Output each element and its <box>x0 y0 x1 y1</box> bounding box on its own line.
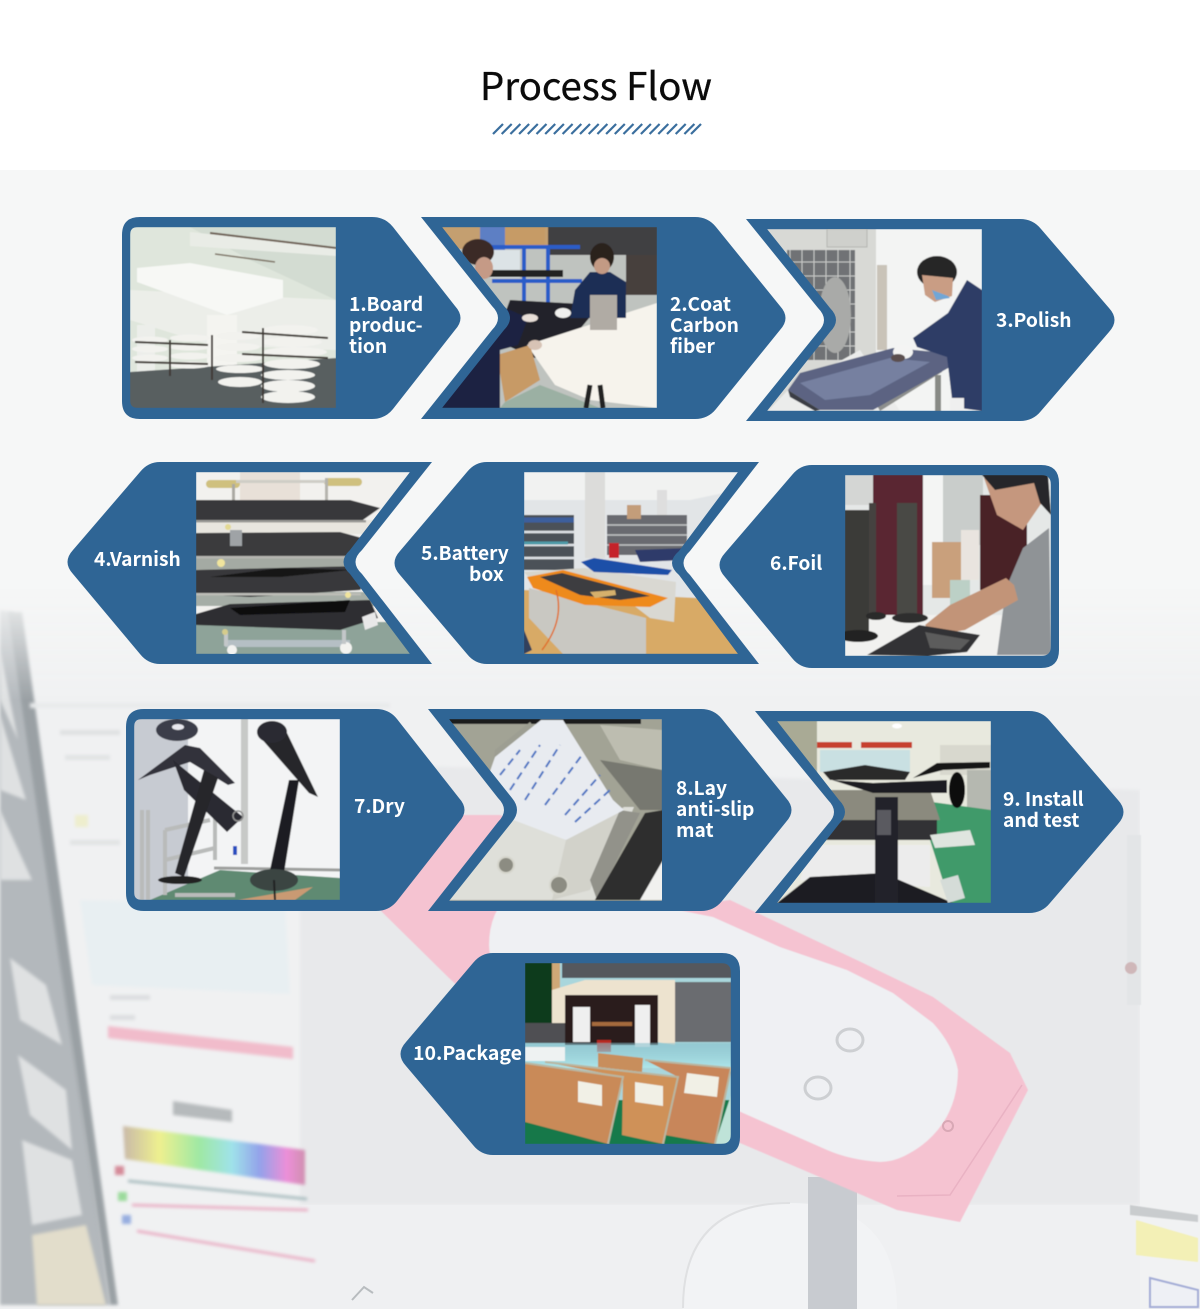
photo: assembled board with mast <box>777 721 991 903</box>
step label: Carbon <box>670 310 739 338</box>
step label: 9. Install <box>1003 784 1084 812</box>
step label: 7.Dry <box>354 791 405 819</box>
step label: 2.Coat <box>670 289 731 317</box>
panel: step 9 install and test <box>755 711 1124 913</box>
panel: step 8 lay anti-slip mat <box>428 709 792 911</box>
photo: wooden packing crates <box>525 963 731 1144</box>
title underline hatch <box>493 124 701 134</box>
panel: step 4 varnish <box>68 462 432 664</box>
panel: step 5 battery box <box>394 462 759 664</box>
photo: workers laying carbon fiber <box>442 227 657 408</box>
step label: and test <box>1003 805 1079 833</box>
photo: varnished carbon boards on a rack <box>196 472 410 655</box>
title: Process Flow <box>480 56 712 111</box>
step label: box <box>469 559 504 587</box>
step label: mat <box>676 815 714 843</box>
step label: 5.Battery <box>421 538 509 566</box>
photo: worker polishing a board <box>767 229 982 411</box>
panel: step 2 coat carbon fiber <box>421 217 786 419</box>
step label: 6.Foil <box>770 548 822 576</box>
panel: step 7 dry <box>126 709 464 911</box>
step label: 4.Varnish <box>94 544 181 572</box>
panel: step 10 package <box>400 953 740 1155</box>
photo: worker with carbon foil masts <box>838 475 1051 656</box>
step label: 3.Polish <box>996 305 1072 333</box>
step label: 8.Lay <box>676 773 727 801</box>
step label: 1.Board <box>349 289 423 317</box>
panel: step 3 polish <box>746 219 1114 421</box>
photo: anti-slip mat with 3M backing <box>449 719 663 901</box>
step label: produc- <box>349 310 423 338</box>
photo: hydrofoils standing to dry <box>134 719 340 900</box>
step label: 10.Package <box>413 1038 522 1066</box>
step label: fiber <box>670 331 715 359</box>
panel: step 1 board production <box>122 217 460 419</box>
step label: tion <box>349 331 387 359</box>
photo: CNC machine and foam boards <box>130 227 336 408</box>
panel: step 6 foil <box>720 465 1059 668</box>
blurred CAD screen backdrop <box>0 560 1200 1309</box>
CAD foil model <box>375 815 1028 1309</box>
step label: anti-slip <box>676 794 754 822</box>
photo: boards in the factory hall <box>524 472 740 654</box>
